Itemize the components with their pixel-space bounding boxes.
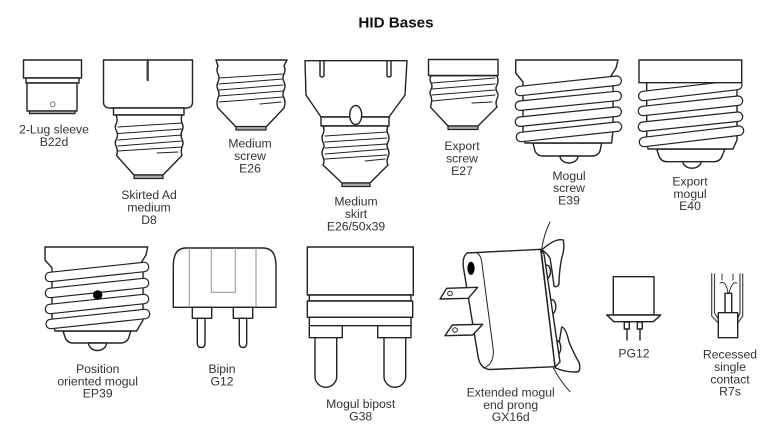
label: Medium xyxy=(334,195,378,209)
label: oriented mogul xyxy=(57,374,138,388)
label: screw xyxy=(446,151,478,165)
base: Extended mogul end prong GX16d xyxy=(440,222,580,424)
base: Mogul bipost G38 xyxy=(307,247,413,423)
base: Medium screw E26 xyxy=(216,60,287,176)
icon: skirted medium base xyxy=(104,60,192,178)
icon: PG12 base xyxy=(607,277,661,340)
label: Export xyxy=(672,175,708,189)
label: Position xyxy=(76,362,119,376)
label: GX16d xyxy=(492,410,530,424)
icon: medium skirt base xyxy=(305,61,407,187)
label: Medium xyxy=(228,136,272,150)
label: Mogul xyxy=(552,169,586,183)
label: E39 xyxy=(558,193,580,207)
base: Bipin G12 xyxy=(173,248,276,388)
base: PG12 xyxy=(607,277,661,361)
label: Extended mogul xyxy=(467,386,555,400)
label: mogul xyxy=(673,187,707,201)
label: EP39 xyxy=(83,387,113,401)
label: end prong xyxy=(483,398,538,412)
label: E40 xyxy=(679,199,701,213)
icon: 2-lug sleeve xyxy=(24,60,82,114)
base: Recessed single contact R7s xyxy=(703,274,757,399)
base: Export mogul E40 xyxy=(639,60,742,213)
label: E26 xyxy=(239,162,261,176)
label: screw xyxy=(553,181,585,195)
base: Skirted Ad medium D8 xyxy=(104,60,192,227)
base: Medium skirt E26/50x39 xyxy=(305,61,407,233)
icon: mogul bipost base xyxy=(307,247,413,387)
label: screw xyxy=(234,149,266,163)
label: G12 xyxy=(210,374,234,388)
label: D8 xyxy=(141,213,157,227)
label: 2-Lug sleeve xyxy=(19,122,89,136)
label: contact xyxy=(710,372,750,386)
label: Export xyxy=(444,139,480,153)
label: B22d xyxy=(40,135,68,149)
label: E27 xyxy=(451,164,473,178)
icon: bipin base xyxy=(173,248,276,348)
title: HID Bases xyxy=(358,14,434,32)
icon: mogul screw base xyxy=(516,60,618,163)
label: Recessed xyxy=(703,348,757,362)
base: Position oriented mogul EP39 xyxy=(45,247,148,401)
label: G38 xyxy=(349,409,372,423)
icon: export screw base xyxy=(428,60,498,130)
base: Mogul screw E39 xyxy=(516,60,618,207)
base: Export screw E27 xyxy=(428,60,498,178)
icon: extended mogul end prong base xyxy=(440,222,580,392)
label: E26/50x39 xyxy=(327,219,385,233)
icon: export mogul base xyxy=(639,60,742,168)
icon: position oriented mogul base xyxy=(45,247,148,351)
label: Bipin xyxy=(208,362,236,376)
label: medium xyxy=(127,200,171,214)
label: R7s xyxy=(719,385,741,399)
label: Skirted Ad xyxy=(121,188,177,202)
icon: R7s recessed contact xyxy=(712,274,743,338)
label: PG12 xyxy=(618,347,650,361)
label: Mogul bipost xyxy=(326,397,395,411)
icon: medium screw base xyxy=(216,60,287,130)
label: single xyxy=(714,360,746,374)
label: skirt xyxy=(345,207,368,221)
base: 2-Lug sleeve B22d xyxy=(19,60,89,149)
